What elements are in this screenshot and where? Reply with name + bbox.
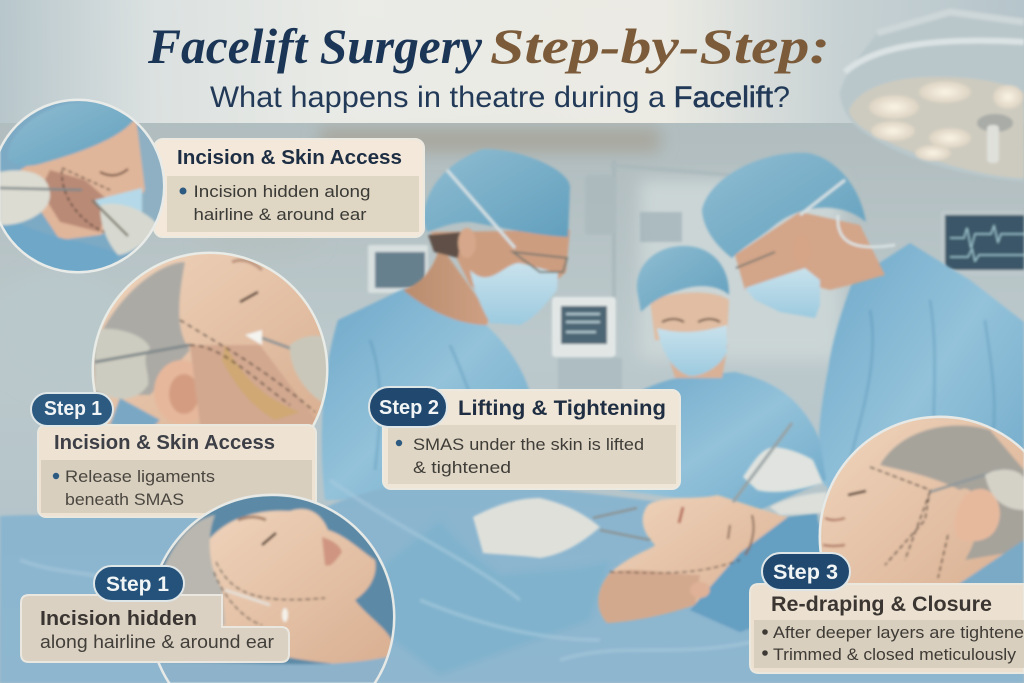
surgeon 2 head	[702, 153, 895, 318]
bullet text line 2: & tightened	[413, 458, 511, 477]
bullet text line 2: beneath SMAS	[65, 490, 184, 509]
title: Facelift Surgery	[147, 18, 483, 74]
bullet	[396, 440, 402, 446]
pill: Step 3: Step 3	[773, 561, 838, 584]
surgical lamp	[840, 10, 1024, 182]
background equipment	[558, 160, 730, 390]
bullet text: Incision hidden along	[194, 182, 370, 201]
title: Step-by-Step:	[490, 18, 830, 74]
bullet	[762, 629, 768, 635]
card title: Incision hidden	[40, 607, 197, 630]
card title: Incision & Skin Access	[54, 432, 275, 454]
bullet	[53, 473, 59, 479]
surgeon gloves and instruments	[473, 423, 827, 558]
portrait circle 3	[150, 495, 395, 683]
nurse	[620, 246, 826, 510]
pill: Step 1	[31, 393, 113, 426]
bullet	[180, 188, 186, 194]
card: Incision & Skin Access (top)	[154, 139, 424, 237]
portrait circle 4	[818, 416, 1024, 583]
card: Step 3 Re-draping & Closure	[750, 584, 1024, 673]
patient	[598, 495, 830, 632]
card title: Incision & Skin Access	[177, 146, 402, 169]
pill: Step 1 lower: Step 1	[106, 573, 169, 596]
bullet text: After deeper layers are tightene	[773, 623, 1024, 642]
card text: along hairline & around ear	[40, 632, 274, 652]
surgeon 2 gown	[818, 243, 1024, 540]
pill: Step 2: Step 2	[379, 397, 439, 419]
monitor centre	[552, 297, 616, 357]
pill: Step 1 lower	[94, 566, 184, 601]
card: Step 1 Incision & Skin Access	[38, 425, 316, 517]
bullet	[762, 650, 768, 656]
surgical drapes	[0, 480, 1024, 683]
surgeon 1	[322, 149, 570, 500]
title	[147, 18, 830, 74]
pill: Step 1: Step 1	[44, 398, 102, 420]
portrait circle 1	[0, 100, 170, 280]
pill: Step 2	[369, 387, 447, 427]
monitor left	[368, 245, 428, 293]
portrait circle 2	[92, 252, 328, 426]
title band	[0, 0, 1024, 123]
pill: Step 3	[762, 553, 850, 590]
card: Step 2 Lifting & Tightening	[383, 390, 680, 489]
card title: Re-draping & Closure	[771, 593, 992, 616]
bullet text line 2: hairline & around ear	[194, 205, 367, 224]
card: Incision hidden	[21, 595, 289, 662]
bullet text: Release ligaments	[65, 467, 215, 486]
bullet text: Trimmed & closed meticulously	[773, 645, 1017, 664]
card title: Lifting & Tightening	[458, 397, 666, 420]
subtitle: What happens in theatre during a Facelift?	[210, 81, 790, 114]
monitor right	[941, 211, 1024, 275]
bullet text: SMAS under the skin is lifted	[413, 435, 644, 454]
